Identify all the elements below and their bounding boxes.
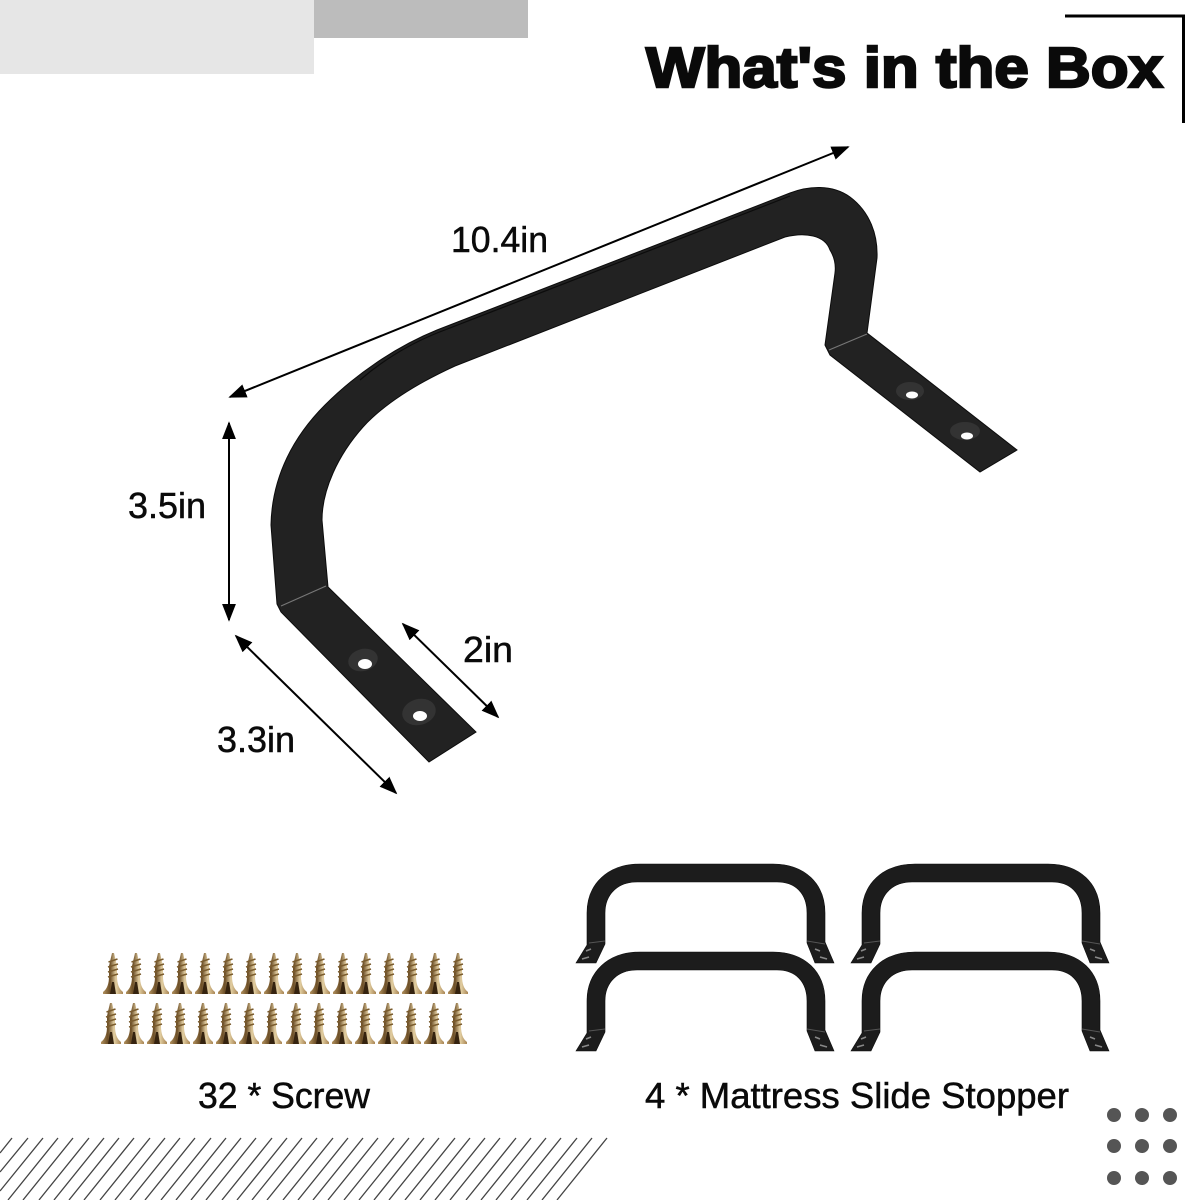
large mattress slide stopper bracket [271, 187, 1017, 762]
decorative dot grid [1107, 1108, 1177, 1185]
title corner frame [1065, 16, 1184, 123]
dimension label: foot length: 3.3in [217, 719, 295, 760]
dimension label: hole span: 2in [463, 629, 513, 670]
dimension label: height: 3.5in [128, 485, 206, 526]
background panel: light grey block [0, 0, 314, 74]
four small brackets [576, 864, 1109, 1051]
dimension label: length: 10.4in [451, 219, 548, 260]
dimension arrow: height [228, 423, 230, 620]
dimension arrow: foot length [236, 636, 396, 793]
decorative hatch pattern [0, 1138, 607, 1200]
screws caption: 32 * Screw [198, 1075, 371, 1116]
brackets caption: 4 * Mattress Slide Stopper [645, 1075, 1069, 1116]
dimension arrow: hole span [403, 624, 498, 717]
title: What's in the Box [646, 36, 1163, 100]
screws set [101, 953, 468, 1044]
background panel: mid grey block [314, 0, 528, 38]
dimension arrow: length [230, 147, 848, 397]
